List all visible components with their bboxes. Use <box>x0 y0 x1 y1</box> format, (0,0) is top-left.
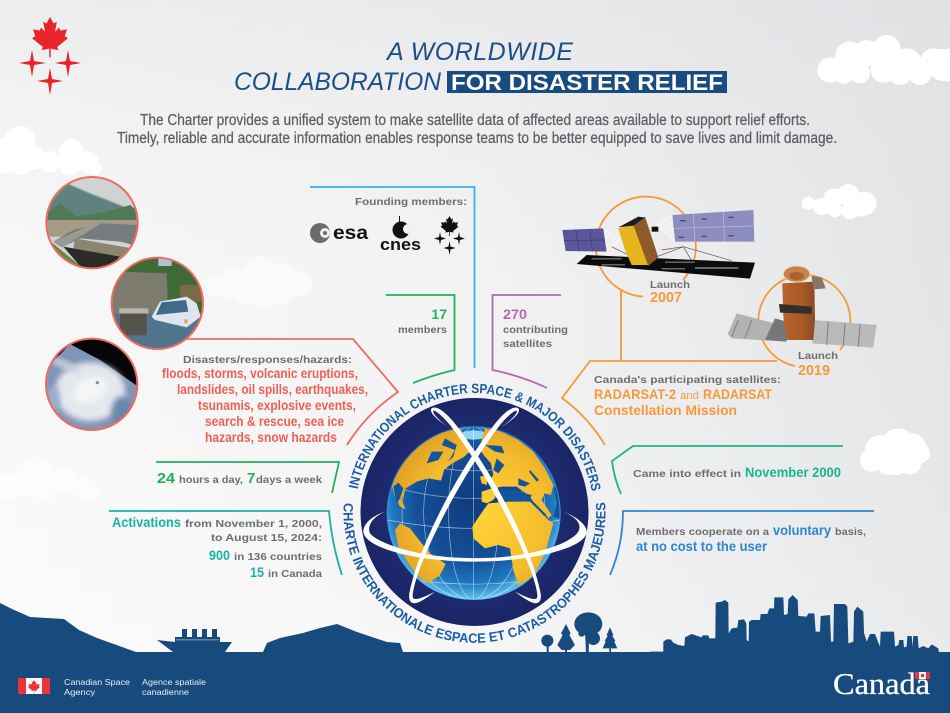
mountains left <box>0 603 136 652</box>
title: A WORLDWIDE <box>385 38 573 66</box>
activations: from November 1, 2000, <box>185 519 322 530</box>
ring text: English: INTERNATIONAL CHARTER SPACE & MAJOR DISASTERS <box>348 384 600 491</box>
orbits <box>363 407 587 603</box>
disasters list <box>162 355 368 445</box>
title <box>234 38 727 96</box>
footer: Canadian Space Agency signature: Agency <box>64 687 96 697</box>
stat: 17 members: members <box>398 325 447 336</box>
activations <box>112 514 323 580</box>
disasters list: floods, storms, volcanic eruptions, <box>162 365 358 381</box>
logo: cnes <box>380 216 421 254</box>
trees <box>541 612 617 653</box>
activations: in 136 countries <box>234 552 323 563</box>
footer: Canadian Space Agency signature <box>18 677 206 697</box>
disasters list: tsunamis, explosive events, <box>198 397 356 413</box>
disasters list: landslides, oil spills, earthquakes, <box>177 381 368 397</box>
Canada's participating satellites <box>594 375 781 418</box>
intro text <box>117 112 837 147</box>
flag <box>18 678 50 694</box>
Canada's participating satellites: RADARSAT-2 <box>594 386 676 402</box>
logo: esa: esa <box>333 223 368 244</box>
disasters list: Disasters/responses/hazards: <box>183 355 352 366</box>
intro text: Timely, reliable and accurate information enables response teams to be better equipped to save lives and limit damage. <box>117 130 837 147</box>
stat: 270 contributing satellites: 270 <box>503 306 527 322</box>
bottom landscape <box>0 595 950 713</box>
disasters list: hazards, snow hazards <box>205 429 337 445</box>
launch 2007: Launch <box>650 280 690 291</box>
logo: red maple leaf and stars <box>19 17 81 95</box>
clouds <box>0 35 950 500</box>
launch 2007 <box>650 280 690 306</box>
Canada's participating satellites: Canada's participating satellites: <box>594 375 781 386</box>
footer: Canada wordmark: Canada <box>833 666 930 701</box>
launch 2019: 2019 <box>798 362 830 379</box>
stat: 270 contributing satellites: contributing <box>503 325 568 336</box>
Canada's participating satellites: RADARSAT <box>703 386 772 402</box>
skyline <box>650 595 950 660</box>
globe <box>387 426 562 600</box>
24 hours a day, 7 days a week: hours a day, <box>179 475 243 486</box>
continents <box>392 428 553 585</box>
activations: to August 15, 2024: <box>211 533 322 544</box>
24 hours a day, 7 days a week: 7 <box>247 470 255 487</box>
footer: Canadian Space Agency signature: Canadian Space <box>64 677 130 687</box>
photo: collapsed bridge <box>46 177 138 270</box>
founding members <box>310 197 467 255</box>
voluntary basis: at no cost to the user <box>636 538 768 554</box>
stat: 17 members <box>398 306 447 336</box>
satellite: RADARSAT Constellation Mission <box>728 266 877 348</box>
logo: cnes: cnes <box>380 235 421 254</box>
disasters list: search & rescue, sea ice <box>205 413 344 429</box>
Canada's participating satellites: and <box>680 390 699 402</box>
24 hours a day, 7 days a week: days a week <box>256 475 322 486</box>
launch 2019 <box>798 351 838 379</box>
activations: in Canada <box>268 569 322 580</box>
activations: Activations <box>112 514 181 530</box>
voluntary basis <box>636 522 866 554</box>
ring text: French: CHARTE INTERNATIONALE ESPACE ET CATASTROPHES MAJEURES <box>343 502 606 643</box>
satellite: RADARSAT-2 <box>562 210 755 279</box>
voluntary basis: basis, <box>835 527 866 538</box>
orange orbit circles around satellites <box>596 197 850 366</box>
title: COLLABORATION <box>234 68 442 96</box>
photo: flooded car <box>112 258 203 350</box>
activations: 900 <box>209 547 230 563</box>
logo: esa <box>310 223 368 244</box>
24 hours a day, 7 days a week <box>157 470 322 487</box>
logo: CSA black <box>434 216 465 255</box>
seas <box>393 438 562 520</box>
launch 2007: 2007 <box>650 289 682 306</box>
stat: 270 contributing satellites: satellites <box>503 339 552 350</box>
24 hours a day, 7 days a week: 24 <box>157 470 176 487</box>
title: FOR DISASTER RELIEF <box>451 70 723 95</box>
founding members: Founding members: <box>355 197 467 208</box>
mountain centre <box>263 624 403 652</box>
ground band <box>0 652 950 713</box>
Canada's participating satellites: Constellation Mission <box>594 402 737 418</box>
footer: Canadian Space Agency signature: canadienne <box>142 687 189 697</box>
voluntary basis: voluntary <box>773 522 831 538</box>
intro text: The Charter provides a unified system to make satellite data of affected areas available to support relief efforts. <box>140 112 810 129</box>
footer: Canadian Space Agency signature: Agence spatiale <box>142 677 206 687</box>
ship <box>157 629 232 652</box>
launch 2019: Launch <box>798 351 838 362</box>
came into effect: November 2000 <box>745 464 841 480</box>
graticule <box>388 426 560 600</box>
came into effect: Came into effect in <box>633 469 741 480</box>
came into effect <box>633 464 841 480</box>
activations: 15 <box>250 564 264 580</box>
stat: 270 contributing satellites <box>503 306 568 350</box>
photo: hurricane from space <box>45 338 138 432</box>
voluntary basis: Members cooperate on a <box>636 527 769 538</box>
callout lines <box>109 187 874 575</box>
stat: 17 members: 17 <box>431 306 447 322</box>
emblem: charter globe <box>343 384 606 643</box>
ring <box>360 398 588 626</box>
